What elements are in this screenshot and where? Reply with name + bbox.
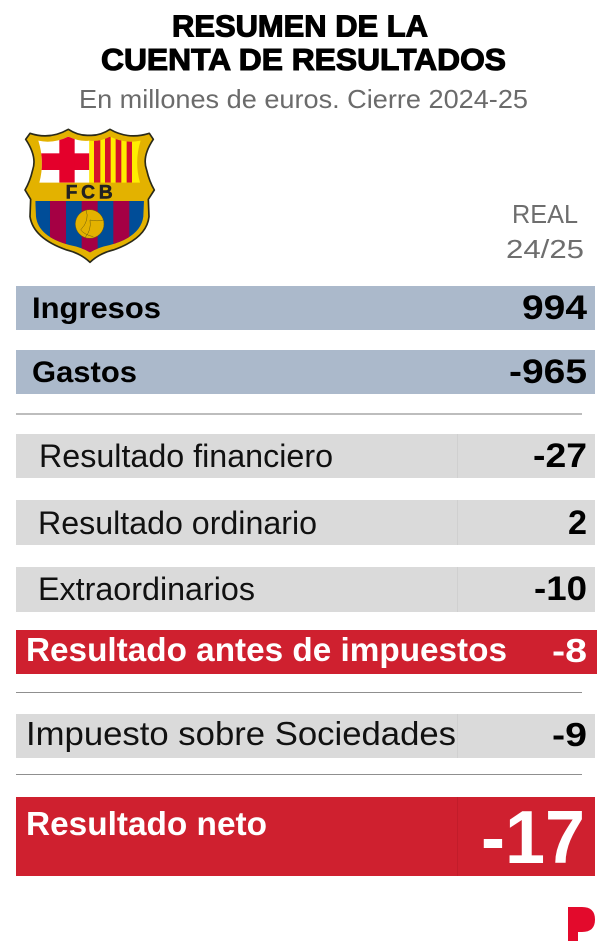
row: Ingresos bbox=[16, 286, 595, 330]
row: Resultado ordinario: Resultado ordinario bbox=[38, 505, 317, 541]
row: Impuesto sobre Sociedades: -9 bbox=[552, 716, 587, 753]
title: RESUMEN DE LA bbox=[172, 8, 428, 44]
icon: publisher logo P bbox=[568, 907, 595, 941]
row: Gastos bbox=[16, 350, 595, 394]
crest letters: FCB bbox=[66, 183, 116, 204]
column heading: REAL 24/25: 24/25 bbox=[506, 234, 584, 264]
row: Resultado financiero: Resultado financiero bbox=[39, 438, 333, 474]
row: Extraordinarios: -10 bbox=[534, 570, 587, 608]
row: Extraordinarios bbox=[16, 567, 595, 612]
row: Gastos: Gastos bbox=[32, 356, 137, 389]
row: Resultado neto: -17 bbox=[481, 795, 585, 879]
row: Resultado neto: Resultado neto bbox=[26, 805, 267, 842]
row: Resultado antes de impuestos: Resultado antes de impuestos bbox=[26, 631, 507, 668]
row: Resultado financiero bbox=[16, 434, 595, 478]
row: Resultado ordinario: 2 bbox=[568, 504, 587, 542]
row: Ingresos: Ingresos bbox=[32, 292, 161, 325]
row: Resultado ordinario bbox=[16, 500, 595, 545]
row: Resultado financiero: -27 bbox=[533, 437, 587, 475]
title: CUENTA DE RESULTADOS bbox=[101, 42, 506, 77]
row: Impuesto sobre Sociedades: Impuesto sobre Sociedades bbox=[26, 715, 456, 752]
row: Gastos: -965 bbox=[509, 353, 587, 391]
row: Resultado neto bbox=[16, 795, 595, 879]
row: Resultado antes de impuestos: -8 bbox=[552, 632, 587, 669]
row: Resultado antes de impuestos bbox=[16, 630, 597, 674]
title bbox=[101, 8, 506, 77]
row: Extraordinarios: Extraordinarios bbox=[38, 571, 255, 607]
column heading: REAL 24/25 bbox=[506, 199, 584, 264]
row: Impuesto sobre Sociedades bbox=[16, 714, 595, 758]
column heading: REAL 24/25: REAL bbox=[512, 199, 578, 229]
icon: FC Barcelona crest bbox=[25, 129, 154, 262]
subtitle: En millones de euros. Cierre 2024-25 bbox=[79, 84, 528, 114]
row: Ingresos: 994 bbox=[522, 289, 587, 327]
